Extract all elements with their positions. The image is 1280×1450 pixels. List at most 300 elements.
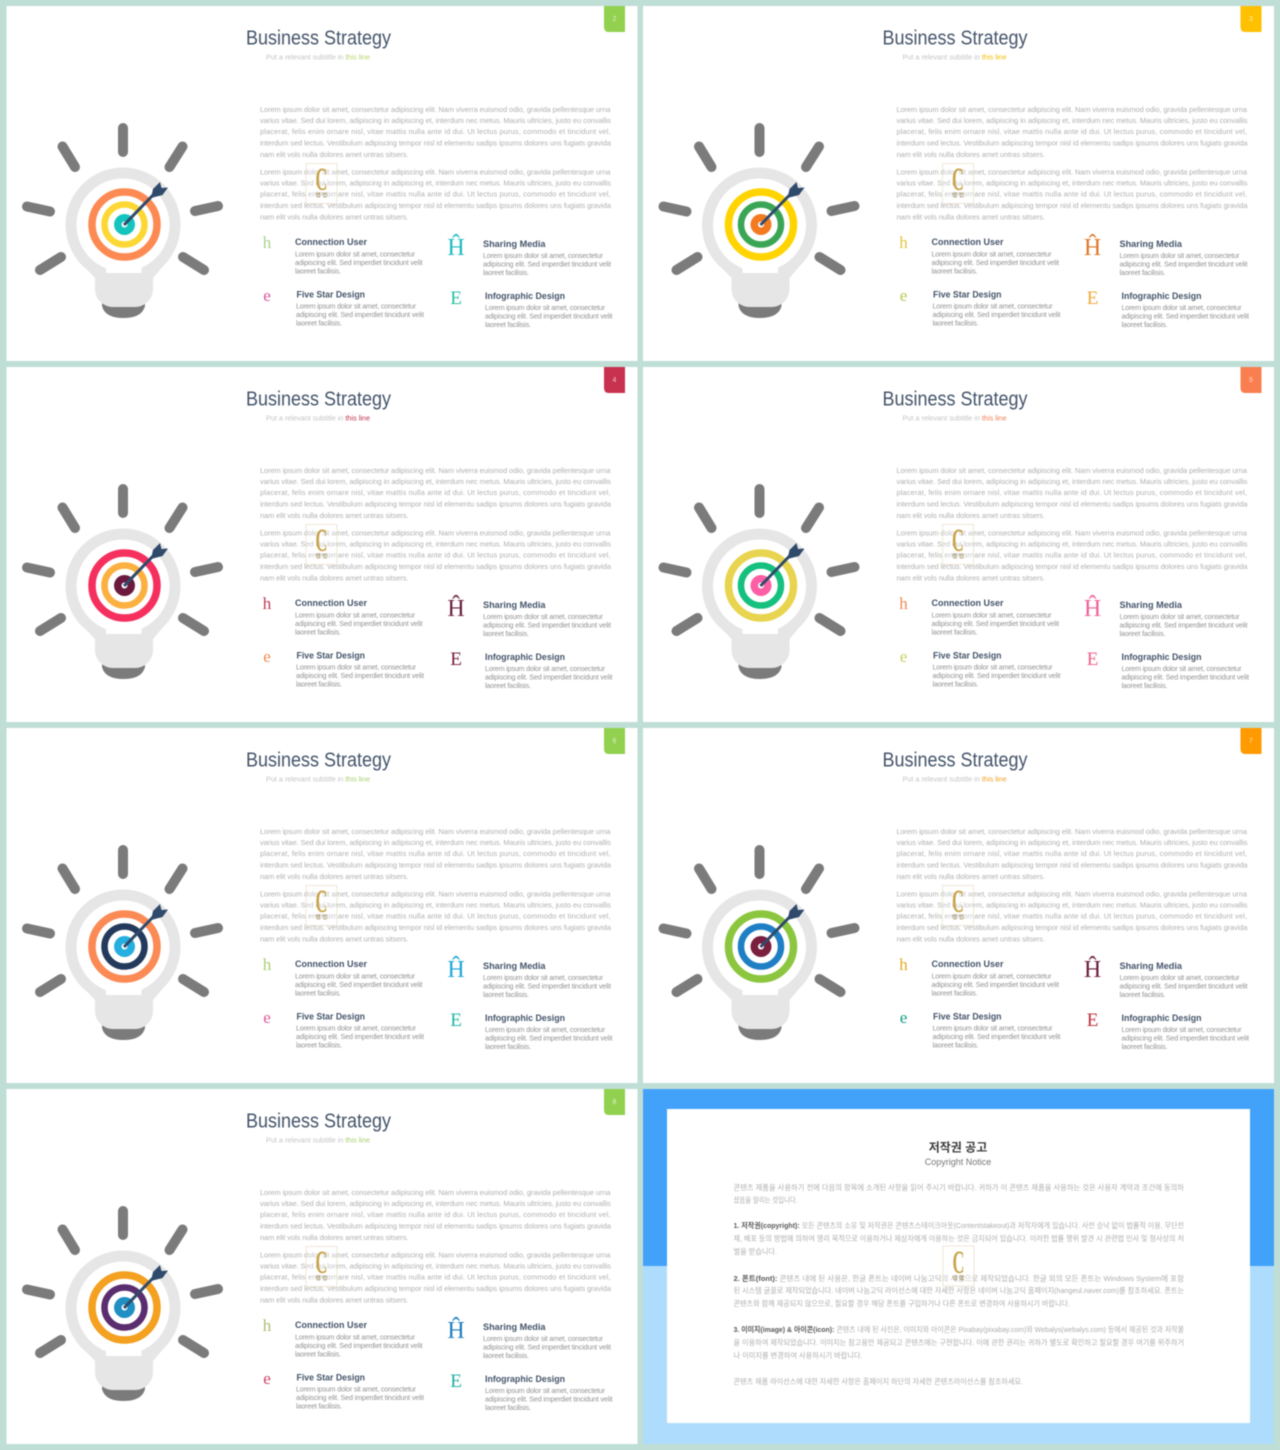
body text: interdum sed lectus. Vestibulum adipiscing tempor nisl id elementu sadips ipsums dolores uns fugiats gravida	[896, 562, 1248, 571]
icon: light bulb target	[664, 489, 854, 679]
feature: sharing media: laoreet facilisis.	[483, 268, 529, 277]
notice text: 1. 저작권(copyright): 모든 콘텐츠의 소유 및 저작권은 콘텐츠스테이크아웃(Contentstakeout)과 저작자에게 있습니다. 사전 승낙 없이 법률적 이용, 무단전	[734, 1220, 1184, 1230]
feature: connection user: Lorem ipsum dolor sit amet, consectetur	[932, 610, 1052, 620]
body text: Lorem ipsum dolor sit amet, consectetur adipiscing elit. Nam viverra euismod odio, gravida pellentesque urna	[896, 890, 1248, 898]
feature: five star design: adipiscing elit. Sed imperdiet tincidunt velit	[296, 1032, 424, 1041]
feature: connection user: laoreet facilisis.	[932, 266, 978, 276]
body text: placerat, felis enim ornare nisl, vitae mattis nulla ante id dui. Ut lectus purus, commodo et tincidunt vel,	[896, 190, 1247, 198]
feature: connection user	[263, 594, 422, 636]
page tab	[604, 1089, 625, 1115]
body text: interdum sed lectus. Vestibulum adipiscing tempor nisl id elementu sadips ipsums dolores uns fugiats gravida	[896, 500, 1248, 508]
feature: infographic design: Lorem ipsum dolor sit amet, consectetur	[485, 664, 606, 673]
subtitle: Put a relevant subtitle in this line	[902, 776, 1007, 784]
feature: connection user: Connection User	[932, 237, 1004, 247]
feature: five star design: Five Star Design	[933, 650, 1002, 660]
watermark: C	[316, 522, 327, 559]
feature: infographic design: Infographic Design	[485, 291, 565, 301]
feature: sharing media: laoreet facilisis.	[1120, 990, 1166, 999]
watermark	[942, 161, 974, 204]
feature: sharing media: Lorem ipsum dolor sit amet, consectetur	[1120, 612, 1240, 621]
body text: Lorem ipsum dolor sit amet, consectetur adipiscing elit. Nam viverra euismod odio, gravida pellentesque urna	[260, 105, 611, 114]
watermark: 맵 맵	[952, 914, 964, 921]
panel: slide 7 green and blue target	[643, 728, 1274, 1083]
title: Business Strategy	[246, 28, 391, 50]
notice text: 3. 이미지(image) & 아이콘(icon): 콘텐츠 내에 된 사진은, 이미지와 아이콘은 Pixabay(pixabay.com)와 Webalys(webalys.com) 등에서 제공된 것과 저작물	[734, 1324, 1184, 1334]
feature: sharing media: Sharing Media	[483, 600, 547, 610]
body text: varius vitae. Sed dui lorem, adipiscing in adipiscing et, interdum nec metus. Mauris ultricies, justo eu convallis	[896, 477, 1248, 486]
feature: five star design	[900, 647, 1060, 688]
notice text: 콘텐츠 제품 라이선스에 대한 자세한 사항은 홈페이지 하단의 자세한 콘텐츠라이선스를 참조하세요.	[734, 1376, 1023, 1386]
body text: varius vitae. Sed dui lorem, adipiscing in adipiscing et, interdum nec metus. Mauris ultricies, justo eu convallis	[260, 838, 611, 847]
feature: infographic design	[1087, 649, 1249, 690]
subtitle: Put a relevant subtitle in this line	[266, 416, 370, 422]
watermark	[306, 883, 337, 926]
body text: varius vitae. Sed dui lorem, adipiscing in adipiscing et, interdum nec metus. Mauris ultricies, justo eu convallis	[260, 477, 611, 486]
page tab	[604, 728, 625, 754]
page tab: 7	[1249, 738, 1253, 745]
feature: connection user: adipiscing elit. Sed imperdiet tincidunt velit	[295, 980, 422, 989]
body text: interdum sed lectus. Vestibulum adipiscing tempor nisl id elementu sadips ipsums dolores uns fugiats gravida	[260, 1284, 612, 1293]
feature: infographic design: Lorem ipsum dolor sit amet, consectetur	[485, 1386, 606, 1395]
feature: infographic design: adipiscing elit. Sed imperdiet tincidunt velit	[1122, 1034, 1249, 1042]
feature: connection user: h	[899, 594, 908, 613]
panel: slide 4 red target	[6, 367, 638, 722]
feature: sharing media: Ĥ	[1084, 596, 1101, 622]
feature: connection user: h	[263, 1316, 272, 1335]
notice text: 셨음을 알리는 것입니다.	[734, 1194, 798, 1204]
body text: placerat, felis enim ornare nisl, vitae mattis nulla ante id dui. Ut lectus purus, commodo et tincidunt vel,	[896, 550, 1247, 560]
body text: Lorem ipsum dolor sit amet, consectetur adipiscing elit. Nam viverra euismod odio, gravida pellentesque urna	[896, 528, 1248, 538]
watermark	[306, 522, 337, 564]
feature: connection user: laoreet facilisis.	[295, 628, 341, 636]
body text: placerat, felis enim ornare nisl, vitae mattis nulla ante id dui. Ut lectus purus, commodo et tincidunt vel,	[896, 912, 1247, 920]
body text: varius vitae. Sed dui lorem, adipiscing in adipiscing et, interdum nec metus. Mauris ultricies, justo eu convallis	[260, 178, 611, 188]
feature: infographic design	[450, 288, 612, 329]
feature: sharing media: Lorem ipsum dolor sit amet, consectetur	[1120, 251, 1240, 260]
feature: sharing media	[447, 957, 611, 999]
feature: connection user: Lorem ipsum dolor sit amet, consectetur	[932, 972, 1052, 980]
panel: slide 6 navy and blue target	[6, 728, 638, 1083]
feature: five star design: adipiscing elit. Sed imperdiet tincidunt velit	[296, 671, 424, 680]
feature: five star design: Lorem ipsum dolor sit amet, consectetur	[296, 1384, 417, 1394]
body text: Lorem ipsum dolor sit amet, consectetur adipiscing elit. Nam viverra euismod odio, gravida pellentesque urna	[260, 1250, 611, 1260]
feature: connection user: adipiscing elit. Sed imperdiet tincidunt velit	[932, 980, 1059, 989]
page tab	[604, 6, 625, 32]
feature: sharing media: laoreet facilisis.	[1120, 629, 1166, 638]
page tab: 6	[613, 738, 617, 745]
body text	[896, 827, 1248, 944]
feature: five star design: e	[263, 286, 271, 305]
body text: interdum sed lectus. Vestibulum adipiscing tempor nisl id elementu sadips ipsums dolores uns fugiats gravida	[260, 1222, 612, 1230]
feature: infographic design: Infographic Design	[1122, 291, 1202, 301]
feature: infographic design: Lorem ipsum dolor sit amet, consectetur	[485, 1025, 606, 1034]
feature: five star design: Five Star Design	[933, 290, 1002, 300]
feature: infographic design	[1087, 1010, 1249, 1051]
feature: sharing media	[447, 1318, 611, 1360]
feature: connection user: laoreet facilisis.	[295, 266, 341, 276]
body text: interdum sed lectus. Vestibulum adipiscing tempor nisl id elementu sadips ipsums dolores uns fugiats gravida	[896, 860, 1248, 870]
feature: five star design: Five Star Design	[296, 290, 365, 300]
body text: Lorem ipsum dolor sit amet, consectetur adipiscing elit. Nam viverra euismod odio, gravida pellentesque urna	[896, 466, 1248, 475]
feature: sharing media: Lorem ipsum dolor sit amet, consectetur	[483, 612, 604, 621]
feature: five star design: Lorem ipsum dolor sit amet, consectetur	[932, 1024, 1053, 1032]
feature: five star design: Five Star Design	[933, 1012, 1002, 1022]
feature: sharing media: Sharing Media	[1120, 239, 1183, 249]
body text: varius vitae. Sed dui lorem, adipiscing in adipiscing et, interdum nec metus. Mauris ultricies, justo eu convallis	[896, 540, 1248, 548]
watermark: C	[316, 161, 327, 198]
feature: connection user: Lorem ipsum dolor sit amet, consectetur	[295, 972, 416, 980]
feature: connection user	[263, 1316, 422, 1358]
feature: five star design	[263, 286, 424, 328]
notice text: 콘텐츠 제품을 사용하기 전에 다음의 항목에 소개된 사항을 읽어 주시기 바랍니다. 귀하가 이 콘텐츠 제품을 사용하는 것은 사용자 계약과 조건에 동의하	[734, 1182, 1184, 1192]
feature: infographic design	[450, 649, 612, 690]
page tab: 2	[613, 16, 617, 23]
page tab: 3	[1249, 16, 1253, 23]
panel: slide 8 amber and purple target	[6, 1089, 638, 1444]
feature: five star design: adipiscing elit. Sed imperdiet tincidunt velit	[932, 310, 1060, 319]
icon: light bulb target	[27, 489, 218, 679]
feature: sharing media	[447, 235, 611, 277]
body text: interdum sed lectus. Vestibulum adipiscing tempor nisl id elementu sadips ipsums dolores uns fugiats gravida	[260, 860, 612, 870]
body text: placerat, felis enim ornare nisl, vitae mattis nulla ante id dui. Ut lectus purus, commodo et tincidunt vel,	[260, 550, 610, 560]
body text: Lorem ipsum dolor sit amet, consectetur adipiscing elit. Nam viverra euismod odio, gravida pellentesque urna	[260, 528, 611, 538]
feature: sharing media: adipiscing elit. Sed imperdiet tincidunt velit	[1120, 982, 1248, 990]
feature: sharing media: Sharing Media	[1120, 961, 1183, 971]
feature: five star design	[263, 1369, 424, 1410]
body text: interdum sed lectus. Vestibulum adipiscing tempor nisl id elementu sadips ipsums dolores uns fugiats gravida	[260, 500, 612, 508]
feature: connection user: laoreet facilisis.	[295, 1350, 341, 1358]
feature: connection user: adipiscing elit. Sed imperdiet tincidunt velit	[295, 619, 422, 628]
feature: five star design: e	[263, 1008, 271, 1027]
watermark: C	[952, 883, 964, 920]
body text: Lorem ipsum dolor sit amet, consectetur adipiscing elit. Nam viverra euismod odio, gravida pellentesque urna	[896, 105, 1248, 114]
feature: sharing media: Ĥ	[1084, 957, 1101, 983]
watermark	[306, 1244, 337, 1286]
watermark: 맵 맵	[316, 553, 327, 560]
body text: placerat, felis enim ornare nisl, vitae mattis nulla ante id dui. Ut lectus purus, commodo et tincidunt vel,	[260, 912, 610, 920]
body text	[896, 105, 1248, 222]
body text: nam elit vols nulla dolores amet untras sitsers.	[260, 1296, 408, 1304]
feature: connection user: adipiscing elit. Sed imperdiet tincidunt velit	[295, 1341, 422, 1350]
feature: connection user: h	[263, 955, 272, 974]
body text: Lorem ipsum dolor sit amet, consectetur adipiscing elit. Nam viverra euismod odio, gravida pellentesque urna	[260, 890, 611, 898]
feature: infographic design: E	[1087, 1010, 1098, 1031]
title: Business Strategy	[246, 750, 391, 772]
body text: placerat, felis enim ornare nisl, vitae mattis nulla ante id dui. Ut lectus purus, commodo et tincidunt vel,	[260, 1272, 610, 1282]
feature: five star design: Lorem ipsum dolor sit amet, consectetur	[296, 662, 417, 672]
notice text: 벌을 받습니다.	[734, 1246, 777, 1256]
body text: placerat, felis enim ornare nisl, vitae mattis nulla ante id dui. Ut lectus purus, commodo et tincidunt vel,	[260, 488, 610, 497]
feature: sharing media: adipiscing elit. Sed imperdiet tincidunt velit	[483, 260, 611, 268]
feature: five star design: adipiscing elit. Sed imperdiet tincidunt velit	[932, 1032, 1060, 1041]
feature: infographic design: Infographic Design	[485, 1374, 565, 1384]
feature: connection user: adipiscing elit. Sed imperdiet tincidunt velit	[932, 619, 1059, 628]
body text: interdum sed lectus. Vestibulum adipiscing tempor nisl id elementu sadips ipsums dolores uns fugiats gravida	[260, 201, 612, 210]
feature: infographic design: E	[450, 288, 462, 309]
heading: copyright notice Korean: 저작권 공고	[929, 1140, 987, 1154]
feature: infographic design: Infographic Design	[485, 1013, 565, 1023]
feature: infographic design: E	[450, 1010, 462, 1031]
body text: nam elit vols nulla dolores amet untras sitsers.	[896, 934, 1045, 944]
title: Business Strategy	[246, 388, 391, 410]
watermark: C	[316, 883, 327, 920]
feature: infographic design: laoreet facilisis.	[485, 320, 531, 329]
feature: connection user: laoreet facilisis.	[932, 988, 978, 998]
feature: connection user: h	[263, 233, 272, 252]
feature: five star design	[263, 647, 424, 688]
feature: connection user	[899, 233, 1059, 276]
page tab	[604, 367, 625, 393]
feature: infographic design: Lorem ipsum dolor sit amet, consectetur	[1122, 664, 1242, 673]
body text: varius vitae. Sed dui lorem, adipiscing in adipiscing et, interdum nec metus. Mauris ultricies, justo eu convallis	[260, 900, 611, 910]
feature: infographic design: Lorem ipsum dolor sit amet, consectetur	[1122, 303, 1242, 312]
feature: five star design: Lorem ipsum dolor sit amet, consectetur	[932, 662, 1053, 672]
feature: connection user	[899, 594, 1059, 636]
title: Business Strategy	[246, 1110, 391, 1132]
feature: five star design: Five Star Design	[296, 1372, 365, 1382]
body text: nam elit vols nulla dolores amet untras sitsers.	[896, 150, 1045, 159]
body text: interdum sed lectus. Vestibulum adipiscing tempor nisl id elementu sadips ipsums dolores uns fugiats gravida	[260, 562, 612, 571]
feature: infographic design: laoreet facilisis.	[485, 681, 531, 690]
feature: connection user: adipiscing elit. Sed imperdiet tincidunt velit	[295, 258, 422, 267]
feature: sharing media: laoreet facilisis.	[1120, 268, 1166, 277]
feature: five star design: e	[900, 1008, 907, 1027]
feature: connection user: Connection User	[932, 598, 1004, 608]
body text: varius vitae. Sed dui lorem, adipiscing in adipiscing et, interdum nec metus. Mauris ultricies, justo eu convallis	[896, 900, 1248, 910]
feature: five star design: adipiscing elit. Sed imperdiet tincidunt velit	[296, 1393, 424, 1402]
page tab: 8	[613, 1099, 617, 1106]
feature: five star design: e	[263, 647, 271, 666]
page tab	[1240, 367, 1262, 393]
watermark	[942, 522, 974, 564]
feature: sharing media: Ĥ	[1084, 235, 1101, 261]
feature: infographic design: laoreet facilisis.	[485, 1042, 531, 1051]
notice text	[734, 1182, 1184, 1386]
body text	[260, 105, 612, 222]
watermark	[306, 161, 337, 204]
watermark: 맵 맵	[316, 914, 327, 921]
body text	[260, 466, 612, 582]
body text: nam elit vols nulla dolores amet untras sitsers.	[260, 1233, 408, 1242]
icon: light bulb target	[27, 128, 218, 318]
subtitle: Put a relevant subtitle in this line	[902, 54, 1007, 62]
feature: five star design: adipiscing elit. Sed imperdiet tincidunt velit	[296, 310, 424, 319]
body text: Lorem ipsum dolor sit amet, consectetur adipiscing elit. Nam viverra euismod odio, gravida pellentesque urna	[260, 168, 611, 176]
feature: infographic design	[1087, 288, 1249, 329]
feature: connection user	[263, 955, 422, 998]
feature: infographic design: adipiscing elit. Sed imperdiet tincidunt velit	[485, 312, 612, 320]
panel: slide 2 orange target	[6, 6, 638, 361]
feature: five star design: laoreet facilisis.	[932, 680, 978, 688]
feature: sharing media	[1084, 957, 1248, 999]
feature: connection user: Lorem ipsum dolor sit amet, consectetur	[295, 1332, 416, 1342]
body text: nam elit vols nulla dolores amet untras sitsers.	[260, 511, 408, 520]
notice text: 된 시스템 글꼴로 제작되었습니다. 네이버 나눔고딕 라이선스에 대한 자세한 사항은 네이버 나눔고딕 홈페이지(hangeul.naver.com)를 참조하세요. 폰트는	[734, 1285, 1184, 1295]
feature: connection user	[899, 955, 1059, 998]
feature: sharing media: laoreet facilisis.	[483, 990, 529, 999]
feature: five star design	[900, 286, 1060, 328]
feature: connection user: laoreet facilisis.	[932, 628, 978, 636]
body text: nam elit vols nulla dolores amet untras sitsers.	[896, 872, 1045, 881]
title: Business Strategy	[882, 750, 1028, 772]
body text: varius vitae. Sed dui lorem, adipiscing in adipiscing et, interdum nec metus. Mauris ultricies, justo eu convallis	[260, 540, 611, 548]
body text: interdum sed lectus. Vestibulum adipiscing tempor nisl id elementu sadips ipsums dolores uns fugiats gravida	[260, 138, 612, 148]
feature: sharing media	[447, 596, 611, 638]
feature: connection user: Lorem ipsum dolor sit amet, consectetur	[932, 250, 1052, 258]
panel: slide 3 yellow target	[643, 6, 1274, 361]
watermark: C	[953, 1244, 964, 1281]
feature: five star design: laoreet facilisis.	[932, 1040, 978, 1050]
feature: infographic design: E	[450, 649, 462, 670]
icon: light bulb target	[27, 1211, 218, 1401]
feature: infographic design: laoreet facilisis.	[1122, 1042, 1168, 1051]
feature: infographic design: Infographic Design	[1122, 1013, 1202, 1023]
feature: connection user: laoreet facilisis.	[295, 988, 341, 998]
feature: five star design: Lorem ipsum dolor sit amet, consectetur	[932, 302, 1053, 310]
body text: nam elit vols nulla dolores amet untras sitsers.	[896, 574, 1045, 582]
feature: sharing media: Lorem ipsum dolor sit amet, consectetur	[483, 251, 604, 260]
body text: Lorem ipsum dolor sit amet, consectetur adipiscing elit. Nam viverra euismod odio, gravida pellentesque urna	[260, 1188, 611, 1197]
body text: placerat, felis enim ornare nisl, vitae mattis nulla ante id dui. Ut lectus purus, commodo et tincidunt vel,	[260, 1210, 610, 1219]
feature: five star design: adipiscing elit. Sed imperdiet tincidunt velit	[932, 671, 1060, 680]
body text: placerat, felis enim ornare nisl, vitae mattis nulla ante id dui. Ut lectus purus, commodo et tincidunt vel,	[260, 190, 610, 198]
body text: nam elit vols nulla dolores amet untras sitsers.	[896, 212, 1045, 222]
page tab: 4	[613, 377, 617, 384]
feature: connection user: Lorem ipsum dolor sit amet, consectetur	[295, 610, 416, 620]
body text: Lorem ipsum dolor sit amet, consectetur adipiscing elit. Nam viverra euismod odio, gravida pellentesque urna	[896, 827, 1248, 836]
feature: infographic design: laoreet facilisis.	[1122, 681, 1168, 690]
watermark: 맵 맵	[316, 1275, 327, 1282]
feature: connection user: Connection User	[295, 959, 367, 969]
feature: sharing media: adipiscing elit. Sed imperdiet tincidunt velit	[1120, 260, 1248, 268]
body text: interdum sed lectus. Vestibulum adipiscing tempor nisl id elementu sadips ipsums dolores uns fugiats gravida	[896, 201, 1248, 210]
feature: connection user: Connection User	[295, 598, 367, 608]
body text: nam elit vols nulla dolores amet untras sitsers.	[896, 511, 1045, 520]
watermark: 맵 맵	[952, 192, 964, 199]
body text: Lorem ipsum dolor sit amet, consectetur adipiscing elit. Nam viverra euismod odio, gravida pellentesque urna	[260, 827, 611, 836]
body text: placerat, felis enim ornare nisl, vitae mattis nulla ante id dui. Ut lectus purus, commodo et tincidunt vel,	[896, 849, 1247, 858]
subtitle: Put a relevant subtitle in this line	[266, 54, 370, 62]
watermark: 맵 맵	[953, 1275, 964, 1282]
body text: nam elit vols nulla dolores amet untras sitsers.	[260, 872, 408, 881]
feature: sharing media: Ĥ	[447, 957, 465, 983]
feature: infographic design: E	[1087, 649, 1098, 670]
feature: infographic design: laoreet facilisis.	[485, 1403, 531, 1412]
feature: connection user: Connection User	[295, 237, 367, 247]
feature: sharing media	[1084, 235, 1248, 277]
feature: infographic design: Lorem ipsum dolor sit amet, consectetur	[485, 303, 606, 312]
watermark: C	[952, 522, 964, 559]
feature: five star design: Lorem ipsum dolor sit amet, consectetur	[296, 1024, 417, 1032]
icon: light bulb target	[27, 850, 218, 1040]
feature: sharing media: laoreet facilisis.	[483, 1351, 529, 1360]
body text: placerat, felis enim ornare nisl, vitae mattis nulla ante id dui. Ut lectus purus, commodo et tincidunt vel,	[260, 849, 610, 858]
feature: sharing media: Ĥ	[447, 235, 465, 261]
feature: five star design: Lorem ipsum dolor sit amet, consectetur	[296, 302, 417, 310]
notice text: 콘텐츠와 함께 제공되지 않으므로, 필요할 경우 해당 폰트를 구입하거나 다른 폰트로 변경하여 사용하시기 바랍니다.	[734, 1298, 1070, 1308]
feature: connection user: Connection User	[932, 959, 1004, 969]
page tab: 5	[1249, 377, 1253, 384]
feature: five star design: Five Star Design	[296, 1012, 365, 1022]
feature: infographic design: adipiscing elit. Sed imperdiet tincidunt velit	[485, 672, 612, 682]
feature: sharing media: adipiscing elit. Sed imperdiet tincidunt velit	[483, 620, 611, 630]
subtitle: Put a relevant subtitle in this line	[266, 776, 370, 784]
body text: interdum sed lectus. Vestibulum adipiscing tempor nisl id elementu sadips ipsums dolores uns fugiats gravida	[896, 138, 1248, 148]
feature: sharing media: adipiscing elit. Sed imperdiet tincidunt velit	[1120, 620, 1248, 630]
feature: sharing media	[1084, 596, 1248, 638]
body text: placerat, felis enim ornare nisl, vitae mattis nulla ante id dui. Ut lectus purus, commodo et tincidunt vel,	[896, 127, 1247, 136]
feature: five star design: laoreet facilisis.	[296, 318, 342, 328]
body text: varius vitae. Sed dui lorem, adipiscing in adipiscing et, interdum nec metus. Mauris ultricies, justo eu convallis	[896, 838, 1248, 847]
feature: five star design: laoreet facilisis.	[296, 680, 342, 688]
body text	[260, 1188, 612, 1304]
body text: interdum sed lectus. Vestibulum adipiscing tempor nisl id elementu sadips ipsums dolores uns fugiats gravida	[260, 923, 612, 932]
panel: slide 5 pink and green target	[643, 367, 1274, 722]
feature: sharing media: Ĥ	[447, 596, 465, 622]
watermark	[942, 883, 974, 926]
body text: interdum sed lectus. Vestibulum adipiscing tempor nisl id elementu sadips ipsums dolores uns fugiats gravida	[896, 923, 1248, 932]
body text: varius vitae. Sed dui lorem, adipiscing in adipiscing et, interdum nec metus. Mauris ultricies, justo eu convallis	[896, 178, 1248, 188]
feature: infographic design: laoreet facilisis.	[1122, 320, 1168, 329]
feature: sharing media: laoreet facilisis.	[483, 629, 529, 638]
feature: sharing media: Lorem ipsum dolor sit amet, consectetur	[483, 1334, 604, 1343]
feature: sharing media: adipiscing elit. Sed imperdiet tincidunt velit	[483, 982, 611, 990]
title: Business Strategy	[882, 388, 1028, 410]
feature: infographic design: adipiscing elit. Sed imperdiet tincidunt velit	[485, 1394, 612, 1404]
feature: infographic design: E	[450, 1371, 462, 1392]
feature: sharing media: adipiscing elit. Sed imperdiet tincidunt velit	[483, 1342, 611, 1352]
body text: placerat, felis enim ornare nisl, vitae mattis nulla ante id dui. Ut lectus purus, commodo et tincidunt vel,	[896, 488, 1247, 497]
body text: varius vitae. Sed dui lorem, adipiscing in adipiscing et, interdum nec metus. Mauris ultricies, justo eu convallis	[260, 116, 611, 125]
feature: sharing media: Sharing Media	[1120, 600, 1183, 610]
body text: varius vitae. Sed dui lorem, adipiscing in adipiscing et, interdum nec metus. Mauris ultricies, justo eu convallis	[260, 1262, 611, 1270]
feature: five star design: laoreet facilisis.	[296, 1040, 342, 1050]
body text: Lorem ipsum dolor sit amet, consectetur adipiscing elit. Nam viverra euismod odio, gravida pellentesque urna	[260, 466, 611, 475]
feature: connection user: h	[899, 955, 908, 974]
feature: sharing media: Sharing Media	[483, 961, 547, 971]
watermark: C	[316, 1244, 327, 1281]
body text: nam elit vols nulla dolores amet untras sitsers.	[260, 212, 408, 222]
body text: Lorem ipsum dolor sit amet, consectetur adipiscing elit. Nam viverra euismod odio, gravida pellentesque urna	[896, 168, 1248, 176]
body text: nam elit vols nulla dolores amet untras sitsers.	[260, 150, 408, 159]
page tab	[1240, 728, 1262, 754]
feature: five star design: laoreet facilisis.	[932, 318, 978, 328]
feature: infographic design: adipiscing elit. Sed imperdiet tincidunt velit	[1122, 672, 1249, 682]
subheading: copyright notice English: Copyright Notice	[925, 1157, 991, 1167]
feature: infographic design: Infographic Design	[1122, 652, 1202, 662]
feature: infographic design: adipiscing elit. Sed imperdiet tincidunt velit	[485, 1034, 612, 1042]
feature: five star design: laoreet facilisis.	[296, 1402, 342, 1410]
feature: five star design	[900, 1008, 1060, 1050]
feature: five star design: e	[263, 1369, 271, 1388]
panel: copyright notice	[643, 1089, 1274, 1444]
feature: five star design: e	[900, 286, 907, 305]
feature: sharing media: Sharing Media	[483, 239, 547, 249]
subtitle: Put a relevant subtitle in this line	[266, 1138, 370, 1144]
icon: light bulb target	[664, 128, 854, 318]
feature: connection user: h	[899, 233, 908, 252]
notice text: 2. 폰트(font): 콘텐츠 내에 된 사용은, 한글 폰트는 네이버 나눔고딕의 사용으로 제작되었습니다. 한글 외의 모든 폰트는 Windows System에 포함	[734, 1273, 1184, 1283]
body text	[896, 466, 1248, 582]
feature: infographic design	[450, 1010, 612, 1051]
watermark: 맵 맵	[316, 192, 327, 199]
watermark	[943, 1244, 974, 1286]
watermark: 맵 맵	[952, 553, 964, 560]
body text: varius vitae. Sed dui lorem, adipiscing in adipiscing et, interdum nec metus. Mauris ultricies, justo eu convallis	[896, 116, 1248, 125]
feature: connection user	[263, 233, 422, 276]
feature: connection user: h	[263, 594, 272, 613]
feature: infographic design: E	[1087, 288, 1098, 309]
